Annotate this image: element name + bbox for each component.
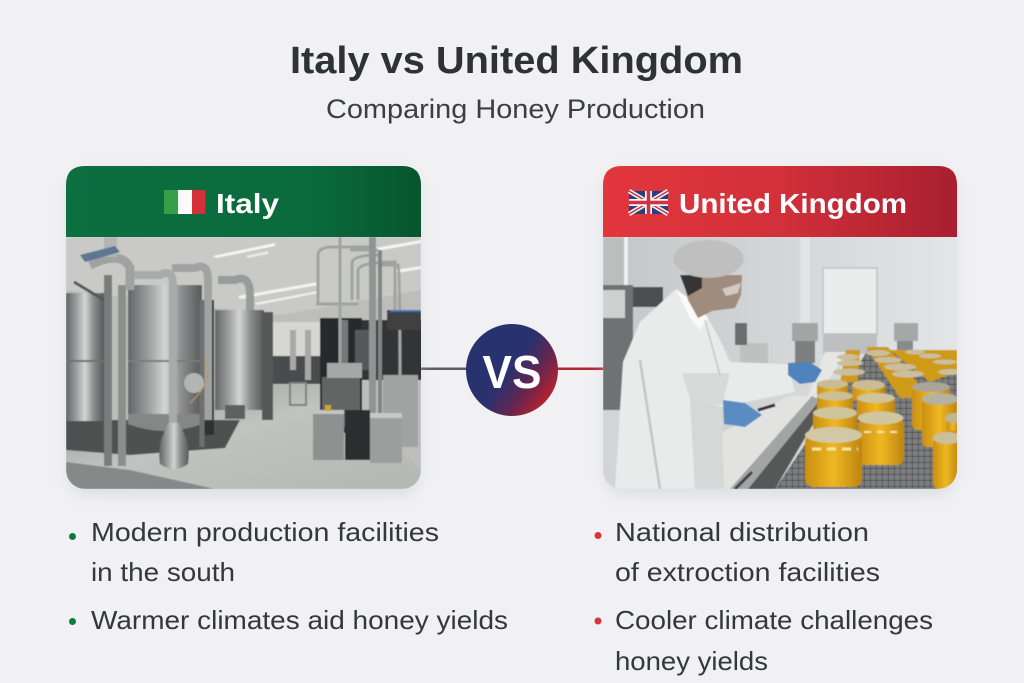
bullet marker xyxy=(69,618,76,625)
bullet text continued: of extroction facilities xyxy=(615,557,880,587)
pipes xyxy=(74,258,250,466)
photo: production facility with steel tanks xyxy=(66,237,422,489)
card shadow xyxy=(605,172,955,495)
bullet marker xyxy=(594,532,602,539)
far hall xyxy=(272,322,321,356)
bullet list: United Kingdom xyxy=(594,517,933,676)
header bar: Italy xyxy=(66,166,421,237)
subtitle: Comparing Honey Production xyxy=(326,94,705,124)
card shadow xyxy=(68,172,419,495)
tanks xyxy=(66,293,104,421)
bullet marker xyxy=(69,533,76,540)
heading: Italy: Italy xyxy=(216,188,279,219)
bullet list: Italy xyxy=(69,517,508,635)
bulb xyxy=(159,423,189,469)
bullet text: warmer climates: Warmer climates aid honey yields xyxy=(91,605,508,635)
door xyxy=(823,268,877,334)
bullet text: cooler climate: Cooler climate challenges xyxy=(615,605,933,635)
icon: UK flag xyxy=(629,191,668,214)
bullet text continued: honey yields xyxy=(615,646,768,676)
VS badge xyxy=(466,324,558,416)
badge circle xyxy=(466,324,558,416)
connector line: VS to UK xyxy=(553,368,603,370)
jars xyxy=(805,380,963,489)
heading: United Kingdom: United Kingdom xyxy=(679,188,907,219)
frame right xyxy=(361,320,421,381)
background machines xyxy=(792,323,818,341)
badge text: VS xyxy=(482,346,542,398)
face xyxy=(682,275,742,318)
conveyor xyxy=(723,395,812,489)
bullet text: production facilities: Modern production facilities xyxy=(91,517,439,547)
bullet text: national distribution: National distribution xyxy=(615,517,869,547)
hairnet xyxy=(674,240,744,278)
icon: Italian flag xyxy=(164,190,206,214)
back jar rows xyxy=(840,347,957,398)
title: Italy vs United Kingdom xyxy=(290,40,743,82)
bullet marker xyxy=(594,618,602,624)
gloves xyxy=(788,362,822,384)
header bar: United Kingdom xyxy=(603,166,957,237)
bullet text continued: in the south xyxy=(91,557,235,587)
connector line: Italy to VS xyxy=(421,368,471,370)
lab coat xyxy=(615,289,795,489)
mesh belt xyxy=(775,350,957,489)
panel: United Kingdom xyxy=(603,166,963,495)
photo: worker inspecting honey jars xyxy=(603,237,963,489)
panel: Italy xyxy=(66,166,422,495)
